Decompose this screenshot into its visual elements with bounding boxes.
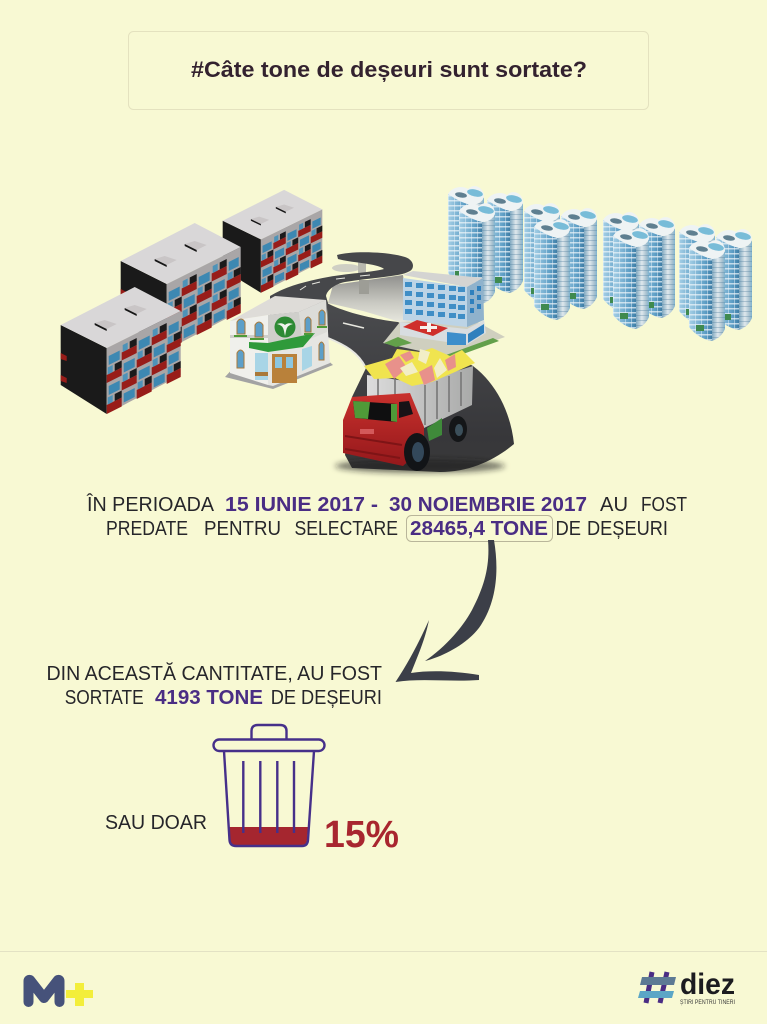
intro sentence: PREDATE [106,517,188,540]
logo: diez: ȘTIRI PENTRU TINERI [680,1000,735,1006]
intro sentence: 15 IUNIE 2017 - [225,493,378,516]
sorted quantity text: DIN ACEASTĂ CANTITATE, AU FOST [46,662,382,685]
sorted quantity text: DE DEȘEURI [271,686,382,709]
arrow [396,540,496,682]
intro sentence: AU [600,493,628,516]
sorted quantity text: 4193 TONE [155,686,263,709]
logo: diez: diez [680,968,735,1001]
intro sentence: 30 NOIEMBRIE 2017 [389,493,587,516]
road [270,252,514,472]
intro sentence [86,493,687,542]
footer divider [0,951,767,952]
intro sentence: ÎN PERIOADA [86,493,214,516]
intro sentence: PENTRU [204,517,281,540]
truck cab [343,393,424,466]
pharmacy [225,296,333,389]
15% figure: 15% [324,814,399,856]
hospital [383,271,505,358]
title box [128,32,648,110]
sorted quantity text [46,662,382,709]
icon: trash bin 15% full [214,725,324,846]
logo: diez [638,968,735,1006]
intro sentence: FOST [641,493,687,516]
truck wheels [449,416,467,442]
truck cargo box [367,366,473,428]
city illustration [61,186,752,473]
sau doar label: SAU DOAR [105,812,207,834]
garbage truck [335,348,505,473]
intro sentence: 28465,4 TONE [410,517,548,540]
highlight box around total [406,516,552,542]
sorted quantity text: SORTATE [65,686,144,709]
logo: M+ [28,980,93,1006]
trash load [364,348,475,386]
intro sentence: DEȘEURI [587,517,668,540]
intro sentence: SELECTARE [294,517,398,540]
intro sentence: DE [556,517,581,540]
title: #Câte tone de deșeuri sunt sortate? [191,57,587,82]
apartment blocks [61,190,322,414]
towers [448,186,752,341]
